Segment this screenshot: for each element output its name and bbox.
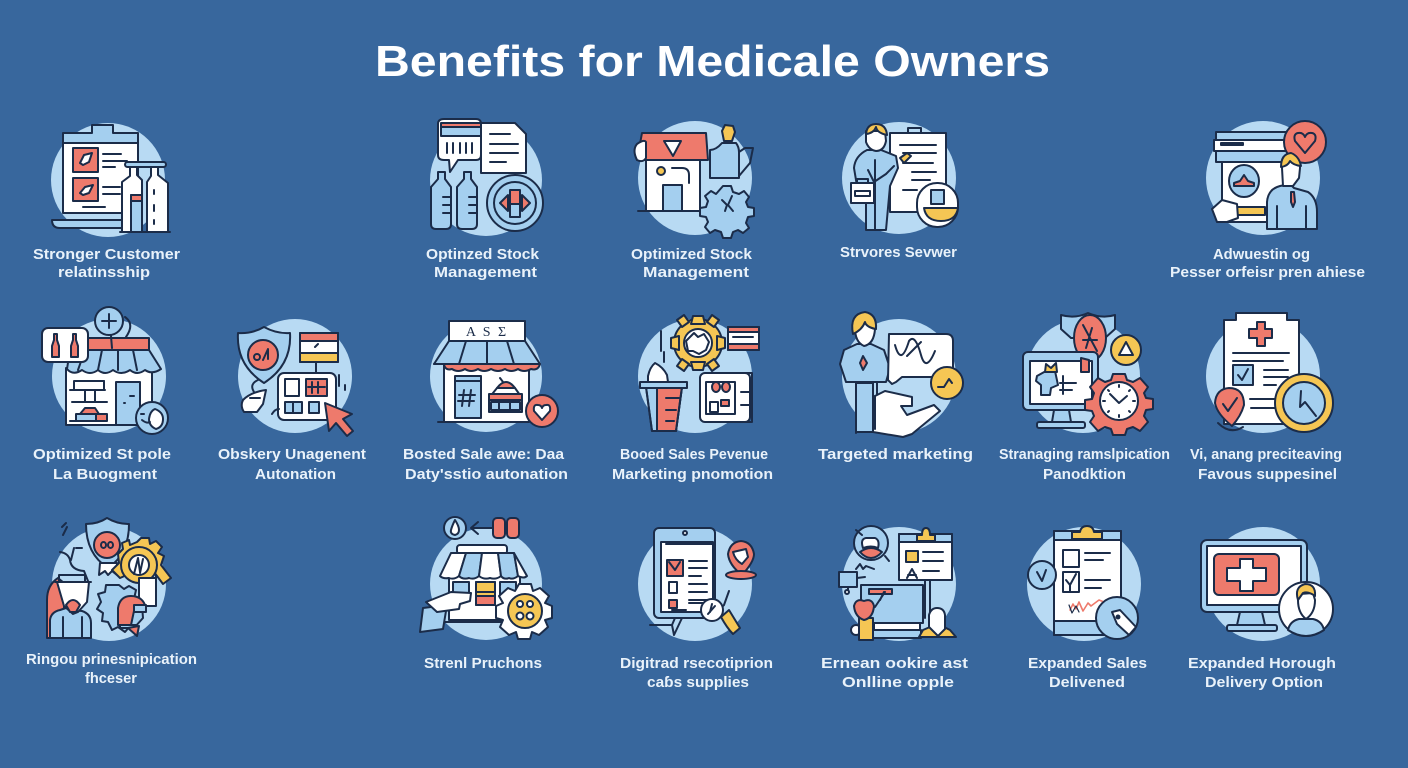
label: fhceser: [85, 670, 137, 687]
label: [612, 446, 773, 483]
icon: clipboard, apple and person: [839, 526, 956, 641]
icon: shop, hand and gear: [420, 517, 552, 640]
icon: advisor and heart badge: [1206, 121, 1326, 235]
panel: expanded horough delivery option: [1188, 527, 1336, 691]
panel: digitrad rsecotiprion: [620, 527, 773, 691]
label: Vi, anang preciteaving: [1190, 446, 1342, 463]
label: La Buogment: [53, 466, 157, 483]
icon: pharmacist and document: [842, 122, 958, 234]
icon: monitor with cross and pharmacist: [1201, 527, 1333, 641]
label: [1170, 246, 1365, 281]
label: Marketing pnomotion: [612, 466, 773, 483]
label: Expanded Horough: [1188, 655, 1336, 672]
label: Targeted marketing: [818, 446, 973, 463]
label: Delivened: [1049, 674, 1125, 691]
label: Pesser orfeisr pren ahiese: [1170, 264, 1365, 281]
label: Stranaging ramslpication: [999, 446, 1170, 463]
panel: optimized stock management row 2: [33, 307, 171, 483]
panel: expanded sales delivened: [1027, 526, 1147, 691]
label: [33, 446, 171, 483]
label: Expanded Sales: [1028, 655, 1147, 672]
panel: vi anang preciteaving: [1190, 313, 1342, 483]
icon: store, kettle and gear: [634, 121, 754, 238]
label: [33, 246, 180, 281]
label: [403, 446, 568, 483]
label: [26, 651, 197, 687]
panel: stronger customer relationship: [33, 123, 180, 281]
icon: storefront with sign: [430, 320, 558, 432]
panel: adwuestin og: [1170, 121, 1365, 281]
panel: ringou prinesnipication: [26, 518, 197, 687]
panel: optimized stock management 2: [631, 121, 754, 281]
label: Daty'sstio autonation: [405, 466, 568, 483]
label: Panodktion: [1043, 466, 1126, 483]
label: [1028, 655, 1147, 691]
label: caɓs supplies: [647, 674, 749, 691]
icon: gear, cup and device: [638, 315, 759, 433]
icon: document and bottles: [51, 123, 170, 237]
panel: strvores sevwer: [840, 122, 958, 261]
label: Ernean ookire ast: [821, 655, 968, 672]
label: Obskery Unagenent: [218, 446, 366, 463]
title: Benefits for Medicale Owners: [375, 37, 1050, 86]
icon: shield, dashboard and cursor: [238, 319, 353, 436]
label: Strenl Pruchons: [424, 655, 542, 672]
icon: pharmacy storefront: [42, 307, 168, 434]
label: Management: [434, 264, 537, 281]
label: [620, 655, 773, 691]
panel: strenl pruchons: [420, 517, 552, 672]
label: Bosted Sale awe: Daa: [403, 446, 565, 463]
label: Digitrad rsecotiprion: [620, 655, 773, 672]
label: Onlline opple: [842, 674, 954, 691]
panel: booed sales revenue: [612, 315, 773, 483]
icon: clipboard with chart: [1027, 526, 1141, 641]
label: [426, 246, 540, 281]
label: Optimized St pole: [33, 446, 171, 463]
label: [631, 246, 753, 281]
icon: prescription with clock: [1206, 313, 1333, 433]
label: Ringou prinesnipication: [26, 651, 197, 668]
label: [1188, 655, 1336, 691]
label: Management: [643, 264, 749, 281]
label: Stronger Customer: [33, 246, 180, 263]
panel: obskery unagenent automation: [218, 319, 366, 483]
label: [1190, 446, 1342, 483]
icon: monitor, shield and clock gear: [1023, 313, 1153, 435]
icon: tablet prescription: [638, 527, 756, 641]
icon: bottles, document and badge: [430, 119, 543, 236]
icon: storefront with sign: A S Σ: [466, 325, 508, 340]
icon: person, shield and gears: [47, 518, 171, 641]
panel: ernean ookire ast: [821, 526, 968, 691]
panel: stranaging ramslpication: [999, 313, 1170, 483]
label: [999, 446, 1170, 483]
label: Optinzed Stock: [426, 246, 540, 263]
label: Strvores Sevwer: [840, 244, 957, 261]
panel: bosted sale: [403, 320, 568, 483]
panel: targeted marketing: [818, 312, 973, 463]
label: [821, 655, 968, 691]
label: relatinsship: [58, 264, 150, 281]
label: Autonation: [255, 466, 336, 483]
label: Delivery Option: [1205, 674, 1323, 691]
label: Optimized Stock: [631, 246, 753, 263]
label: [218, 446, 366, 483]
label: Adwuestin og: [1213, 246, 1310, 263]
icon: person, chat and hand: [840, 312, 963, 437]
panel: optimized stock management 1: [426, 119, 543, 281]
label: Favous suppesinel: [1198, 466, 1337, 483]
label: Booed Sales Pevenue: [620, 446, 768, 463]
